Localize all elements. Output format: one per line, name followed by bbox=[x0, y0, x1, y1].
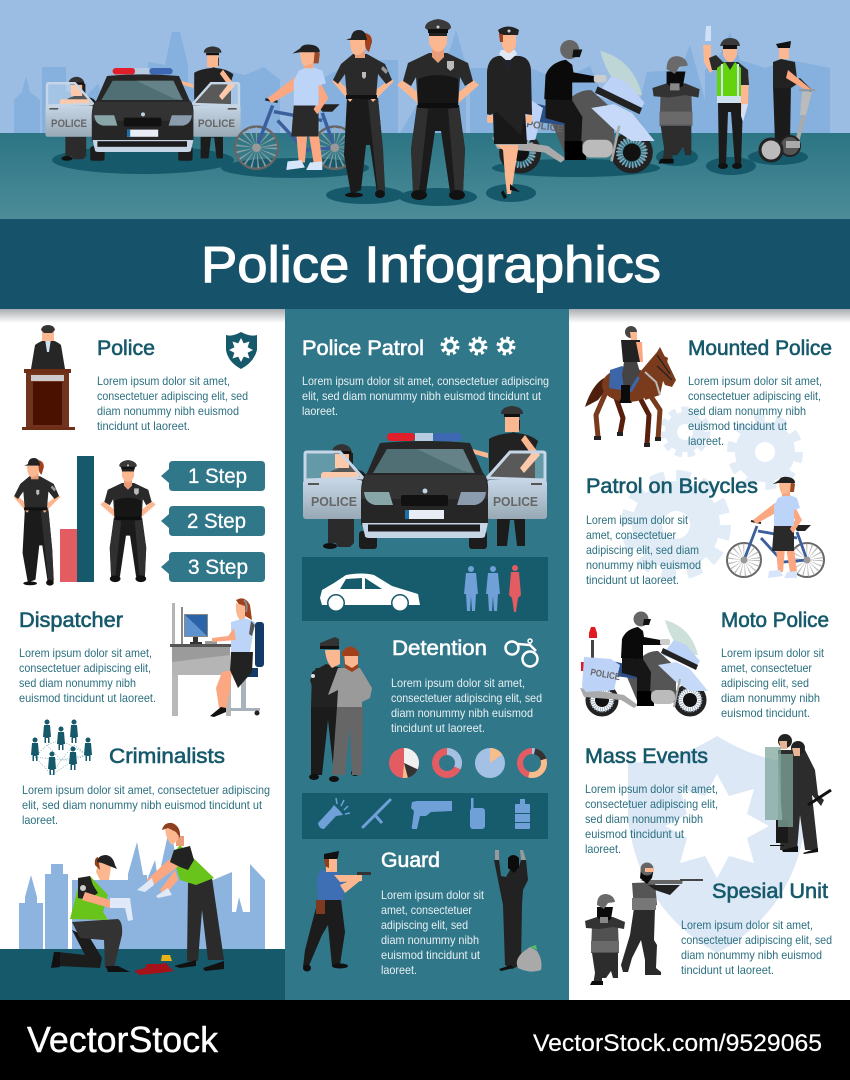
text: mass events: sed diam nonummy nibh bbox=[585, 812, 703, 826]
illustration: riot police with shields bbox=[765, 734, 831, 854]
hero: traffic officer with raised hand bbox=[703, 26, 749, 169]
text: police patrol bbox=[302, 374, 549, 418]
text: mounted police: sed diam nonummy nibh bbox=[688, 404, 806, 418]
title banner bbox=[0, 219, 850, 309]
panel: center column bbox=[285, 309, 569, 1000]
text: police: tincidunt ut laoreet. bbox=[97, 419, 190, 433]
icon: shield bbox=[226, 332, 257, 369]
heading: dispatcher: Dispatcher bbox=[19, 609, 123, 632]
step label 2: 2 Step bbox=[187, 510, 246, 533]
heading: criminalists: Criminalists bbox=[109, 745, 225, 768]
illustration: special unit sniper bbox=[621, 862, 703, 975]
icon: baton handle bbox=[375, 815, 382, 823]
step label 1 bbox=[161, 461, 265, 491]
illustration: dispatcher at desk bbox=[170, 598, 264, 717]
text: special unit bbox=[681, 918, 832, 977]
text: patrol on bicycles: adipiscing elit, sed diam bbox=[586, 543, 699, 557]
hero: patrol car with officers: POLICE bbox=[51, 118, 87, 130]
panel: car and suspects bbox=[302, 557, 548, 621]
icon: handcuffs bbox=[506, 639, 538, 666]
text: special unit: Lorem ipsum dolor sit amet, bbox=[681, 918, 813, 932]
icon: suspects bbox=[464, 565, 521, 612]
chart: pie 1 bbox=[396, 756, 412, 770]
text: moto police: amet, consectetuer bbox=[721, 661, 812, 675]
illustration: standing criminalist bbox=[137, 823, 224, 971]
step label 1: 1 Step bbox=[188, 465, 247, 488]
illustration: moto police: POLICE bbox=[589, 667, 621, 683]
text: special unit: consectetuer adipiscing elit, sed bbox=[681, 933, 832, 947]
text: guard bbox=[381, 888, 485, 977]
icon: canister bbox=[515, 799, 530, 829]
hero: patrol car with officers: POLICE bbox=[198, 118, 235, 130]
shadows of hero figures bbox=[52, 146, 808, 206]
illustration: shooting guard bbox=[303, 851, 371, 972]
text: mass events bbox=[585, 782, 718, 856]
illustration: kneeling criminalist bbox=[51, 855, 133, 972]
heading: mass events: Mass Events bbox=[585, 745, 708, 768]
bar chart bbox=[60, 456, 94, 582]
text: moto police: adipiscing elit, sed bbox=[721, 676, 809, 690]
text: guard: amet, consectetuer bbox=[381, 903, 472, 917]
text: moto police: diam nonummy nibh bbox=[721, 691, 820, 705]
watermark logo: VectorStock bbox=[27, 1019, 219, 1060]
text: mounted police: euismod tincidunt ut bbox=[688, 419, 788, 433]
heading: police: Police bbox=[97, 337, 155, 360]
step label 3: 3 Step bbox=[188, 556, 248, 579]
illustration: special unit kneeling officer bbox=[585, 894, 625, 985]
heading: moto police: Moto Police bbox=[721, 609, 829, 632]
text: moto police: euismod tincidunt. bbox=[721, 706, 810, 720]
text: moto police bbox=[721, 646, 825, 720]
illustration: patrol car: POLICE bbox=[493, 494, 538, 509]
text: detention: diam nonummy nibh euismod bbox=[391, 706, 533, 720]
hero: woman in suit bbox=[487, 26, 532, 199]
background shield bbox=[628, 736, 806, 953]
icon: officer at podium bbox=[22, 325, 75, 430]
step label 3 bbox=[161, 552, 265, 582]
text: mounted police bbox=[688, 374, 822, 448]
text: dispatcher: Lorem ipsum dolor sit amet, bbox=[19, 646, 152, 660]
text: moto police: Lorem ipsum dolor sit bbox=[721, 646, 825, 660]
text: police: consectetuer adipiscing elit, sed bbox=[97, 389, 248, 403]
illustration: patrol car bbox=[303, 406, 547, 549]
illustration: patrol car: POLICE bbox=[311, 494, 357, 509]
text: detention: consectetuer adipiscing elit, sed bbox=[391, 691, 542, 705]
background: sky bbox=[0, 0, 850, 133]
hero: special unit officer bbox=[652, 56, 700, 164]
evidence: blood and marker bbox=[134, 955, 174, 975]
heading: mounted police: Mounted Police bbox=[688, 337, 832, 360]
text: patrol on bicycles: nonummy nibh euismod bbox=[586, 558, 701, 572]
hero: male officer bbox=[397, 19, 479, 200]
background gears bbox=[628, 410, 798, 573]
watermark url: VectorStock.com/9529065 bbox=[533, 1030, 822, 1057]
text: patrol on bicycles: Lorem ipsum dolor sit bbox=[586, 513, 689, 527]
icon: pistol bbox=[411, 801, 452, 829]
text: dispatcher: sed diam nonummy nibh bbox=[19, 676, 136, 690]
chart: donut 2 bbox=[436, 752, 458, 774]
hero: patrol car with officers bbox=[45, 46, 241, 161]
text: guard: euismod tincidunt ut bbox=[381, 948, 481, 962]
text: mounted police: Lorem ipsum dolor sit amet, bbox=[688, 374, 822, 388]
text: patrol on bicycles bbox=[586, 513, 701, 587]
heading: guard: Guard bbox=[381, 849, 440, 872]
text: police: Lorem ipsum dolor sit amet, bbox=[97, 374, 230, 388]
panel: left column bbox=[0, 309, 285, 1000]
text: criminalists: elit, sed diam nonummy nibh euismod tincidunt ut bbox=[22, 798, 263, 812]
panel: right column bbox=[569, 309, 850, 1000]
text: guard: laoreet. bbox=[381, 963, 417, 977]
text: police patrol: elit, sed diam nonummy nibh euismod tincidunt ut bbox=[302, 389, 542, 403]
chart: pie 3 bbox=[482, 756, 498, 770]
hero: motorcycle officer bbox=[492, 40, 655, 170]
text: guard: adipiscing elit, sed bbox=[381, 918, 468, 932]
icon: radio bbox=[470, 798, 485, 829]
illustration: detention officer and suspect bbox=[309, 637, 372, 782]
icon: three gears bbox=[442, 338, 514, 354]
watermark bar bbox=[0, 1000, 850, 1080]
hero: bicycle officer bbox=[235, 45, 356, 170]
text: mass events: Lorem ipsum dolor sit amet, bbox=[585, 782, 718, 796]
illustration: mounted police bbox=[585, 326, 676, 447]
text: criminalists bbox=[22, 783, 270, 827]
text: police bbox=[97, 374, 248, 433]
text: special unit: diam nonummy nibh euismod bbox=[681, 948, 822, 962]
text: mass events: euismod tincidunt ut bbox=[585, 827, 685, 841]
ground band bbox=[0, 133, 850, 219]
icon: white car bbox=[320, 574, 420, 612]
heading: police patrol: Police Patrol bbox=[302, 337, 424, 360]
text: police patrol: Lorem ipsum dolor sit amet, consectetuer adipiscing bbox=[302, 374, 549, 388]
text: special unit: tincidunt ut laoreet. bbox=[681, 963, 774, 977]
figure: female officer bbox=[13, 458, 61, 586]
step label 2 bbox=[161, 506, 265, 536]
text: detention bbox=[391, 676, 542, 735]
text: guard: Lorem ipsum dolor sit bbox=[381, 888, 485, 902]
hero: segway officer bbox=[760, 41, 815, 161]
text: dispatcher bbox=[19, 646, 156, 705]
text: patrol on bicycles: tincidunt ut laoreet. bbox=[586, 573, 679, 587]
text: mounted police: consectetuer adipiscing elit, bbox=[688, 389, 821, 403]
icon: flashlight bbox=[318, 798, 350, 829]
text: police patrol: laoreet. bbox=[302, 404, 338, 418]
heading: detention: Detention bbox=[392, 637, 487, 660]
hero skyline bbox=[14, 30, 830, 133]
heading: patrol on bicycles: Patrol on Bicycles bbox=[586, 475, 758, 498]
illustration: moto police bbox=[580, 612, 708, 714]
illustration: thief with bag bbox=[494, 850, 542, 972]
hero: motorcycle officer: POLICE bbox=[526, 119, 564, 135]
text: criminalists: Lorem ipsum dolor sit amet, consectetuer adipiscing bbox=[22, 783, 270, 797]
heading: special unit: Spesial Unit bbox=[712, 880, 828, 903]
panel: equipment icons bbox=[302, 793, 548, 839]
text: mass events: consectetuer adipiscing elit, bbox=[585, 797, 718, 811]
ground strip bbox=[0, 949, 285, 1000]
icon: baton bbox=[363, 800, 390, 827]
chart: donut 4 bbox=[520, 751, 544, 775]
illustration: officer with bicycle bbox=[727, 477, 824, 578]
text: criminalists: laoreet. bbox=[22, 813, 58, 827]
icon: criminalists network bbox=[31, 720, 92, 775]
illustration: city skyline bbox=[19, 825, 265, 949]
figure: male officer bbox=[100, 460, 156, 582]
text: dispatcher: euismod tincidunt ut laoreet. bbox=[19, 691, 156, 705]
text: guard: diam nonummy nibh bbox=[381, 933, 479, 947]
hero: female officer bbox=[332, 30, 394, 198]
text: mass events: laoreet. bbox=[585, 842, 621, 856]
text: mounted police: laoreet. bbox=[688, 434, 724, 448]
text: dispatcher: consectetuer adipiscing elit, bbox=[19, 661, 151, 675]
text: patrol on bicycles: amet, consectetuer bbox=[586, 528, 676, 542]
text: detention: tincidunt ut laoreet. bbox=[391, 721, 485, 735]
title: Police Infographics bbox=[201, 236, 661, 293]
text: detention: Lorem ipsum dolor sit amet, bbox=[391, 676, 525, 690]
text: police: diam nonummy nibh euismod bbox=[97, 404, 239, 418]
